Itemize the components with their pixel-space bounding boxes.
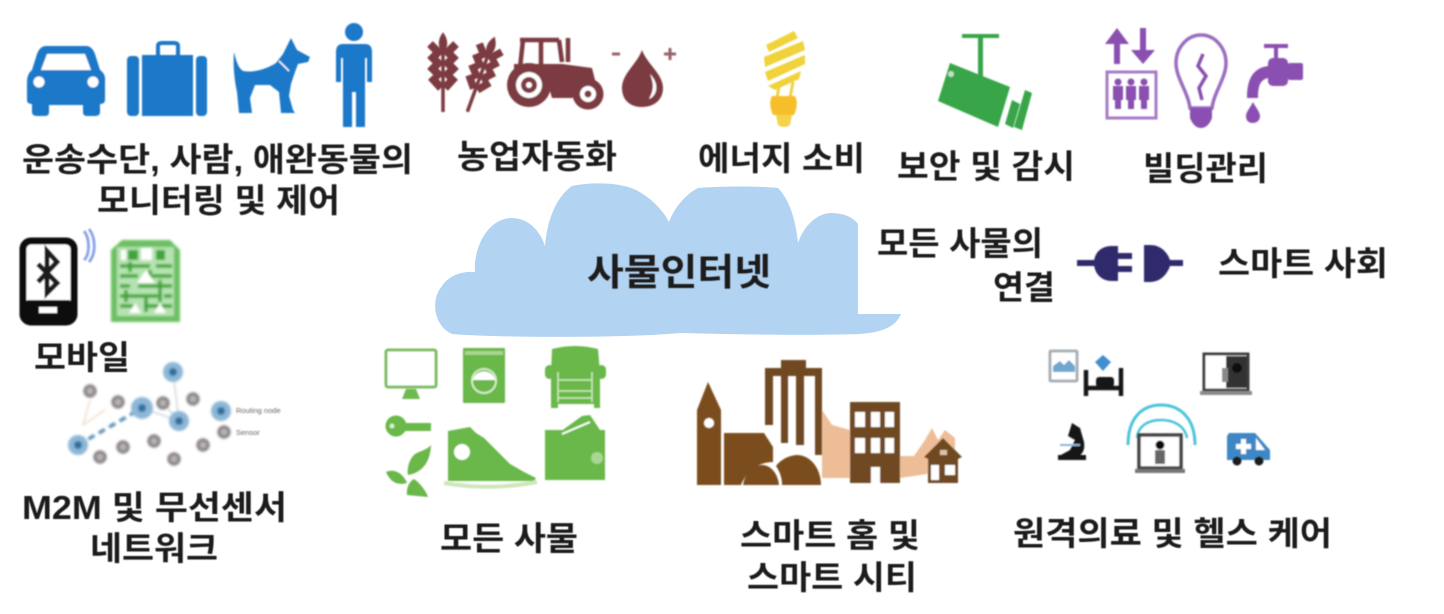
diagram: sensor network — [68, 362, 281, 464]
label: M2M and wireless sensor networks: 네트워크 — [90, 530, 218, 567]
icon: patient monitor — [1050, 351, 1077, 381]
icon: water drop — [612, 48, 676, 107]
label: energy consumption: 에너지 소비 — [698, 140, 865, 177]
icon: suitcase — [127, 43, 207, 116]
label: M2M and wireless sensor networks — [22, 489, 287, 567]
icon: light bulb — [1176, 35, 1226, 128]
icon: elevator — [1105, 28, 1156, 118]
icon: wheat — [430, 33, 506, 116]
label: smart home and smart city — [740, 517, 920, 596]
icon: smart city skyline — [697, 360, 962, 485]
icon: tractor — [507, 38, 604, 110]
icon: wireless telemedicine — [1128, 405, 1195, 473]
icon: person — [336, 23, 372, 127]
icon: microscope — [1058, 423, 1086, 460]
icon: armchair — [545, 346, 606, 408]
label: smart home and smart city: 스마트 홈 및 — [740, 517, 920, 554]
icon: monitor — [386, 350, 436, 399]
icon: circuit board — [111, 240, 180, 322]
label: vehicles, people, pets: 모니터링 및 제어 — [97, 182, 340, 219]
icon: car — [27, 46, 105, 116]
label: vehicles, people, pets: 운송수단, 사람, 애완동물의 — [22, 141, 413, 178]
label: smart home and smart city: 스마트 시티 — [747, 559, 917, 596]
icon: wallet — [545, 415, 605, 480]
icon: energy-saving bulb — [764, 31, 805, 127]
label: M2M and wireless sensor networks: M2M 및 무선센서 — [22, 489, 287, 526]
icon: plug and socket — [1078, 245, 1183, 282]
diagram: sensor network: Routing node — [236, 406, 281, 415]
icon: sneaker — [444, 427, 537, 487]
label: connecting all things: 연결 — [993, 269, 1055, 306]
icon: water tap — [1246, 44, 1303, 123]
label: mobile: 모바일 — [34, 339, 130, 376]
icon: bluetooth phone — [23, 229, 94, 322]
label: smart society: 스마트 사회 — [1218, 245, 1388, 282]
icon: leaf sprout — [386, 445, 431, 497]
icon: doctor laptop — [1200, 354, 1252, 395]
diagram: sensor network: Sensor — [236, 428, 260, 437]
icon: ambulance — [1227, 433, 1270, 466]
icon: washing machine — [463, 348, 505, 403]
cloud title: 사물인터넷 — [587, 252, 771, 293]
label: security and surveillance: 보안 및 감시 — [897, 148, 1075, 185]
icon: key — [386, 416, 431, 436]
label: vehicles, people, pets — [22, 141, 413, 219]
label: everything: 모든 사물 — [440, 520, 578, 557]
icon: dog — [234, 38, 310, 113]
label: building management: 빌딩관리 — [1143, 150, 1268, 187]
label: farm automation: 농업자동화 — [457, 138, 617, 175]
icon: security camera — [938, 34, 1032, 130]
label: telemedicine and health care: 원격의료 및 헬스 케어 — [1013, 515, 1332, 552]
cloud: 사물인터넷 — [435, 183, 901, 337]
label: connecting all things: 모든 사물의 — [877, 225, 1043, 262]
label: connecting all things — [877, 225, 1055, 306]
icon: hospital bed — [1086, 355, 1121, 396]
